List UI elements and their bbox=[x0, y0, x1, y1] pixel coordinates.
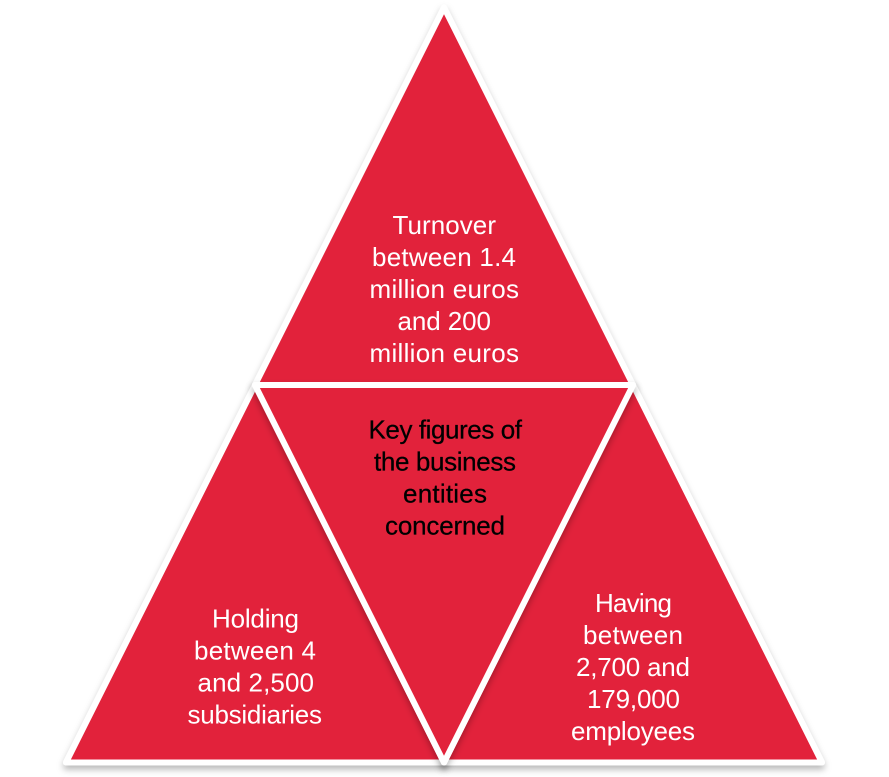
text: employees: 179,000 bbox=[587, 684, 680, 714]
text: employees: 2,700 and bbox=[576, 652, 690, 682]
triangle: subsidiaries (bottom left) bbox=[66, 385, 444, 762]
text: turnover: million euros bbox=[370, 274, 519, 304]
text: key figures heading: concerned bbox=[385, 510, 505, 540]
text: key figures heading: the business bbox=[374, 446, 516, 476]
text: subsidiaries: between 4 bbox=[194, 636, 316, 666]
text: employees: between bbox=[583, 620, 683, 650]
triangle: turnover (top) bbox=[255, 8, 633, 385]
text: employees: Having bbox=[595, 588, 672, 618]
text: employees bbox=[571, 588, 695, 746]
text: turnover: and 200 bbox=[398, 306, 491, 336]
text: subsidiaries: Holding bbox=[212, 604, 299, 634]
triangle: employees (bottom right) bbox=[444, 385, 822, 762]
text: turnover: between 1.4 bbox=[372, 242, 516, 272]
text: key figures heading: entities bbox=[403, 478, 487, 508]
text: key figures heading bbox=[368, 414, 523, 540]
text: turnover bbox=[370, 210, 519, 368]
text: subsidiaries: and 2,500 bbox=[198, 668, 314, 698]
text: employees: employees bbox=[571, 716, 695, 746]
triangle: key figures (centre, inverted) bbox=[255, 385, 633, 762]
text: turnover: Turnover bbox=[392, 210, 496, 240]
text: key figures heading: Key figures of bbox=[368, 414, 523, 444]
text: turnover: million euros bbox=[370, 338, 519, 368]
text: subsidiaries bbox=[188, 604, 322, 730]
text: subsidiaries: subsidiaries bbox=[188, 700, 322, 730]
